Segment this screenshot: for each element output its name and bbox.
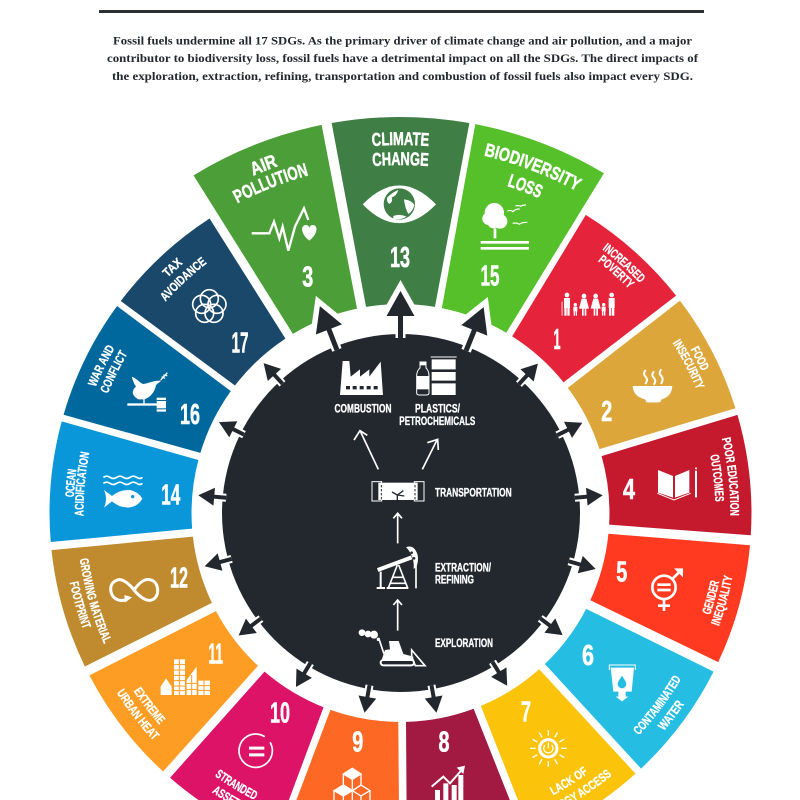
number 12: 12	[170, 563, 188, 595]
label: tax avoidance: TAX AVOIDANCE	[160, 256, 207, 302]
panel: SDG 10 stranded assets	[170, 672, 324, 800]
label: combustion: COMBUSTION	[334, 404, 392, 416]
label: gender inequality: GENDER INEQUALITY	[702, 574, 732, 626]
intro text	[107, 36, 698, 83]
panel: SDG 11 extreme urban heat	[89, 611, 258, 772]
icon: rising chart	[432, 766, 465, 800]
arrows radiating to each SDG	[197, 280, 604, 714]
panel: SDG 7 lack of energy access	[480, 669, 636, 800]
label: poor education outcomes: POOR EDUCATIONOUTCOMES	[710, 437, 740, 516]
number 14: 14	[161, 479, 180, 511]
icon: bowl	[633, 369, 672, 402]
label: growing material footprint: GROWING MATERIALFOOTPRINT	[70, 558, 111, 644]
panel: SDG 17 tax avoidance	[120, 218, 286, 386]
number 7: 7	[521, 697, 531, 729]
number 6: 6	[582, 640, 594, 672]
icon: eye with globe	[363, 185, 436, 223]
number 8: 8	[438, 727, 450, 759]
arrow: exploration to extraction	[393, 600, 402, 631]
icon: tree and birds	[481, 203, 529, 250]
icon: bulldozer with smoke	[359, 629, 425, 666]
label: ocean acidification: OCEAN ACIDIFICATION	[65, 452, 90, 516]
number 15: 15	[480, 261, 500, 293]
label: air pollution: AIR POLLUTION	[232, 155, 308, 204]
panel: SDG 6 contaminated water	[545, 608, 714, 769]
panel: SDG 14 ocean acidification	[50, 421, 198, 542]
intro text: Fossil fuels undermine all 17 SDGs. As the primary driver of climate change and air pollution, and a major	[113, 36, 692, 48]
number 16: 16	[180, 399, 200, 431]
panel: SDG 11 extreme urban heat: 11	[208, 638, 223, 670]
label: plastics / petrochemicals: PETROCHEMICALS	[399, 416, 476, 428]
label: contaminated water: CONTAMINATED WATER	[634, 676, 684, 734]
icon: pumpjack	[377, 547, 418, 588]
panel: SDG 5 gender inequality	[590, 534, 750, 662]
number 13: 13	[390, 242, 410, 274]
panel: SDG 8	[380, 704, 527, 800]
panel: SDG 15 biodiversity loss	[442, 124, 604, 333]
top rule	[99, 10, 704, 13]
panel: SDG 16 war and conflict	[64, 306, 231, 453]
panel: SDG 1 increased poverty: 1	[554, 324, 560, 356]
panel: SDG 9	[279, 705, 424, 800]
icon: stacked cubes	[334, 768, 370, 800]
icon: book and pencil	[657, 467, 697, 500]
number 4: 4	[623, 474, 635, 506]
panel: SDG 13 climate change	[332, 117, 470, 307]
icon: five linked rings	[193, 290, 226, 322]
label: extreme urban heat: EXTREMEURBAN HEAT	[118, 686, 166, 740]
label: food insecurity: FOODINSECURITY	[672, 338, 708, 388]
panel: SDG 3 air pollution	[194, 124, 357, 334]
arrow: extraction to transportation	[393, 513, 402, 543]
label: climate change: CLIMATECHANGE	[372, 132, 430, 166]
number 3: 3	[302, 262, 313, 294]
number 10: 10	[270, 698, 290, 730]
icon: gender symbol	[652, 568, 683, 611]
panel: SDG 1 increased poverty	[512, 214, 676, 382]
icon: city	[161, 659, 210, 695]
panel: SDG 12 growing material footprint	[52, 536, 212, 666]
intro text: the exploration, extraction, refining, transportation and combustion of fossil fuels also impact every SDG.	[112, 71, 693, 83]
label: extraction / refining: REFINING	[435, 574, 474, 586]
label: plastics / petrochemicals	[399, 404, 476, 428]
label: extraction / refining: EXTRACTION/	[435, 563, 492, 575]
label: biodiversity loss: BIODIVERSITYLOSS	[484, 143, 583, 198]
panel: SDG 2 food insecurity	[568, 300, 736, 450]
label: exploration: EXPLORATION	[435, 638, 493, 650]
icon: family	[562, 293, 615, 316]
icon: fish and waves	[103, 476, 142, 508]
icon: bottle and barrel	[417, 357, 457, 395]
number 5: 5	[616, 557, 627, 589]
number 17: 17	[232, 328, 248, 360]
label: increased poverty: INCREASEDPOVERTY	[598, 242, 645, 288]
number 2: 2	[601, 396, 612, 428]
icon: infinity loop	[111, 579, 158, 603]
label: war and conflict: WAR AND CONFLICT	[87, 345, 127, 393]
number 9: 9	[352, 727, 363, 759]
icon: sun with power symbol	[530, 730, 567, 767]
icon: water filter	[609, 665, 635, 701]
label: extraction / refining	[435, 563, 492, 586]
icon: equals in ring	[233, 728, 278, 773]
icon: dove and gavel	[127, 373, 167, 412]
arrows from transportation	[354, 431, 438, 469]
intro text: contributor to biodiversity loss, fossil fuels have a detrimental impact on all the SDGs. The direct impacts of	[107, 53, 698, 65]
icon: pipeline	[372, 482, 424, 501]
icon: heartbeat	[252, 208, 317, 251]
label: plastics / petrochemicals: PLASTICS/	[415, 404, 461, 416]
panel: SDG 4 poor education outcomes	[602, 414, 752, 536]
central dark circle	[222, 334, 580, 692]
icon: factory	[340, 361, 383, 395]
label: transportation: TRANSPORTATION	[435, 488, 512, 500]
